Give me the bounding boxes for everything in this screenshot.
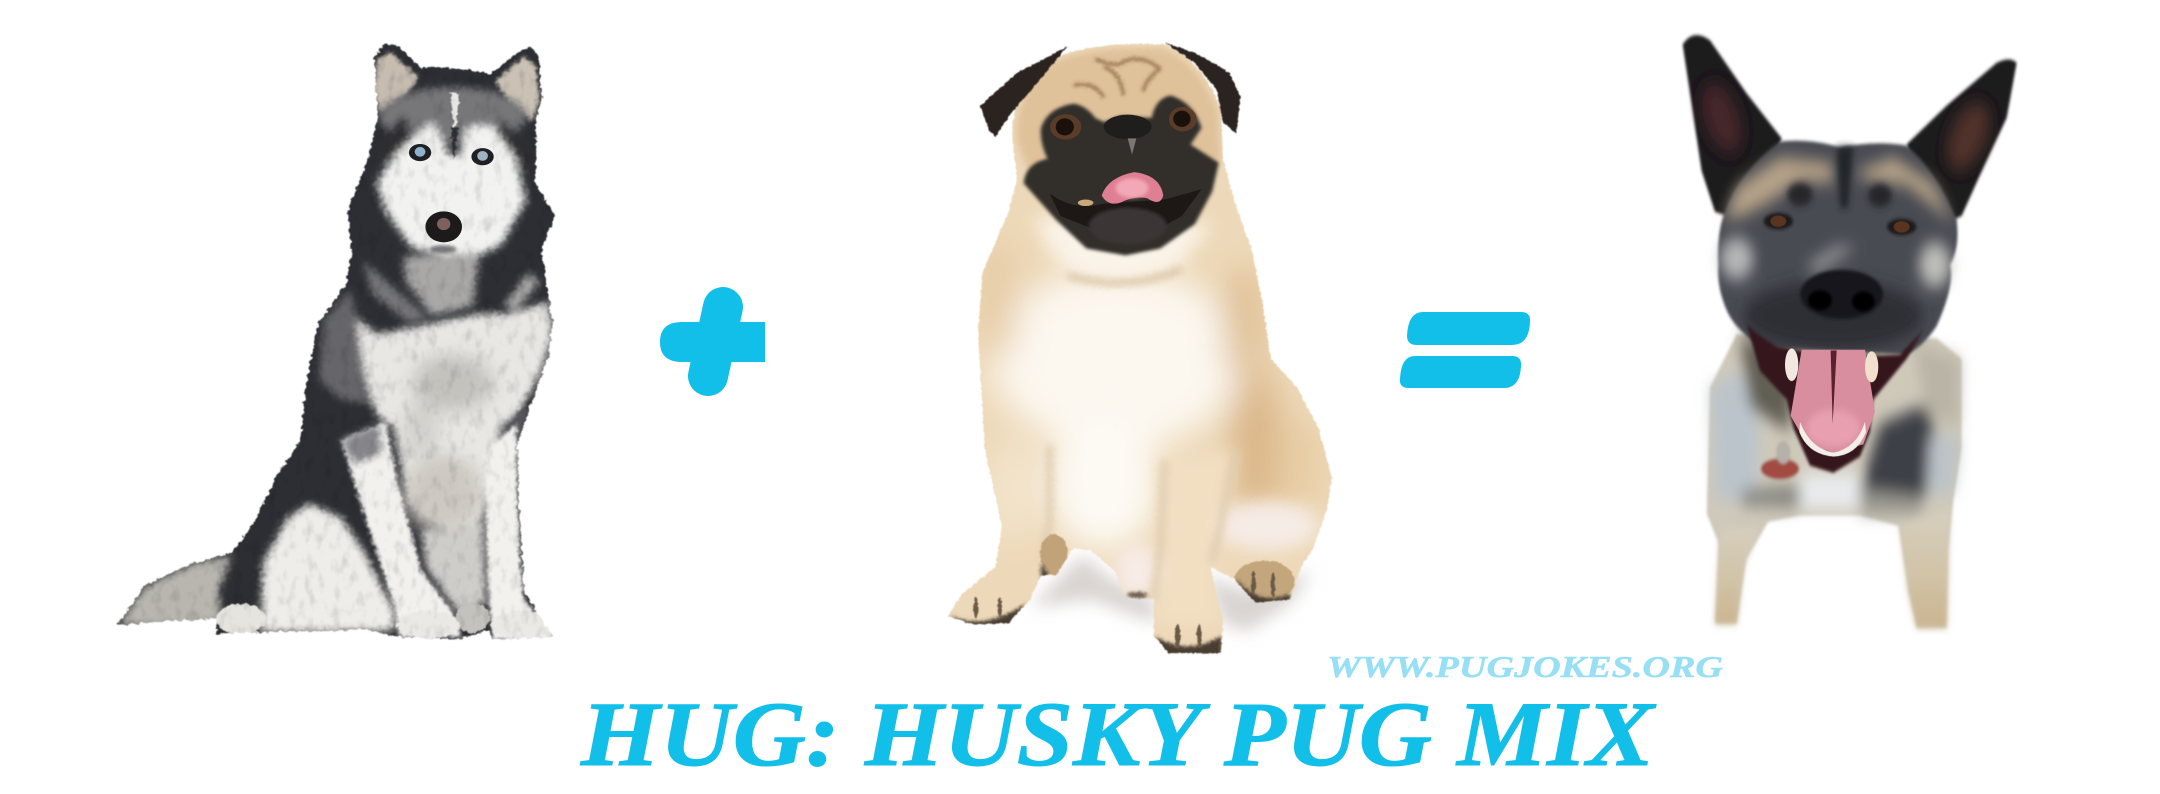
pug ears [980, 42, 1240, 137]
pug photo illustration [943, 36, 1342, 661]
husky photo illustration [116, 42, 556, 640]
icon: plus sign [660, 307, 765, 376]
mix dog photo illustration [1683, 35, 2017, 628]
title: HUG: HUSKY PUG MIX [580, 683, 1657, 785]
icon: equals sign [1400, 312, 1530, 388]
mix dog ears [1683, 35, 2017, 220]
mix dog open mouth [1747, 324, 1923, 473]
floor shadow under pug [1030, 554, 1312, 632]
website label: WWW.PUGJOKES.ORG [1327, 649, 1724, 684]
mix dog head [1718, 141, 1957, 355]
mix dog body [1707, 334, 1962, 628]
pug mask [1024, 95, 1219, 255]
